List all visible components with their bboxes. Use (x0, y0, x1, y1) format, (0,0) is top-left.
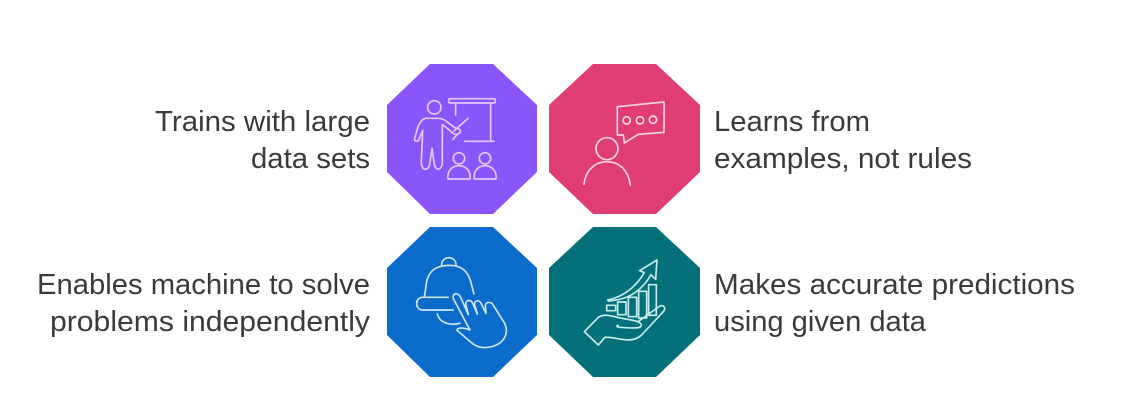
panel: blue octagon (387, 227, 537, 377)
text: trains with large data sets (155, 106, 370, 175)
text: trains with large data sets: Trains with large (155, 106, 370, 138)
text: makes accurate predictions: using given data (714, 306, 927, 338)
icon: presenter with audience (415, 99, 496, 179)
text: enables machine to solve problems: Enables machine to solve (37, 269, 370, 301)
icon: hand pressing bell (417, 258, 506, 348)
panel: teal octagon (549, 227, 700, 377)
icon: hand holding rising bar chart (584, 260, 665, 345)
text: learns from examples: examples, not rules (714, 143, 972, 175)
text: learns from examples (714, 106, 972, 175)
text: learns from examples: Learns from (714, 106, 870, 138)
panel: purple octagon (387, 64, 537, 214)
text: trains with large data sets: data sets (251, 143, 370, 175)
text: enables machine to solve problems: problems independently (50, 306, 371, 338)
text: makes accurate predictions (714, 269, 1075, 338)
text: enables machine to solve problems (37, 269, 371, 338)
panel: pink octagon (549, 64, 700, 214)
icon: person with speech bubble (584, 102, 664, 185)
text: makes accurate predictions: Makes accurate predictions (714, 269, 1075, 301)
